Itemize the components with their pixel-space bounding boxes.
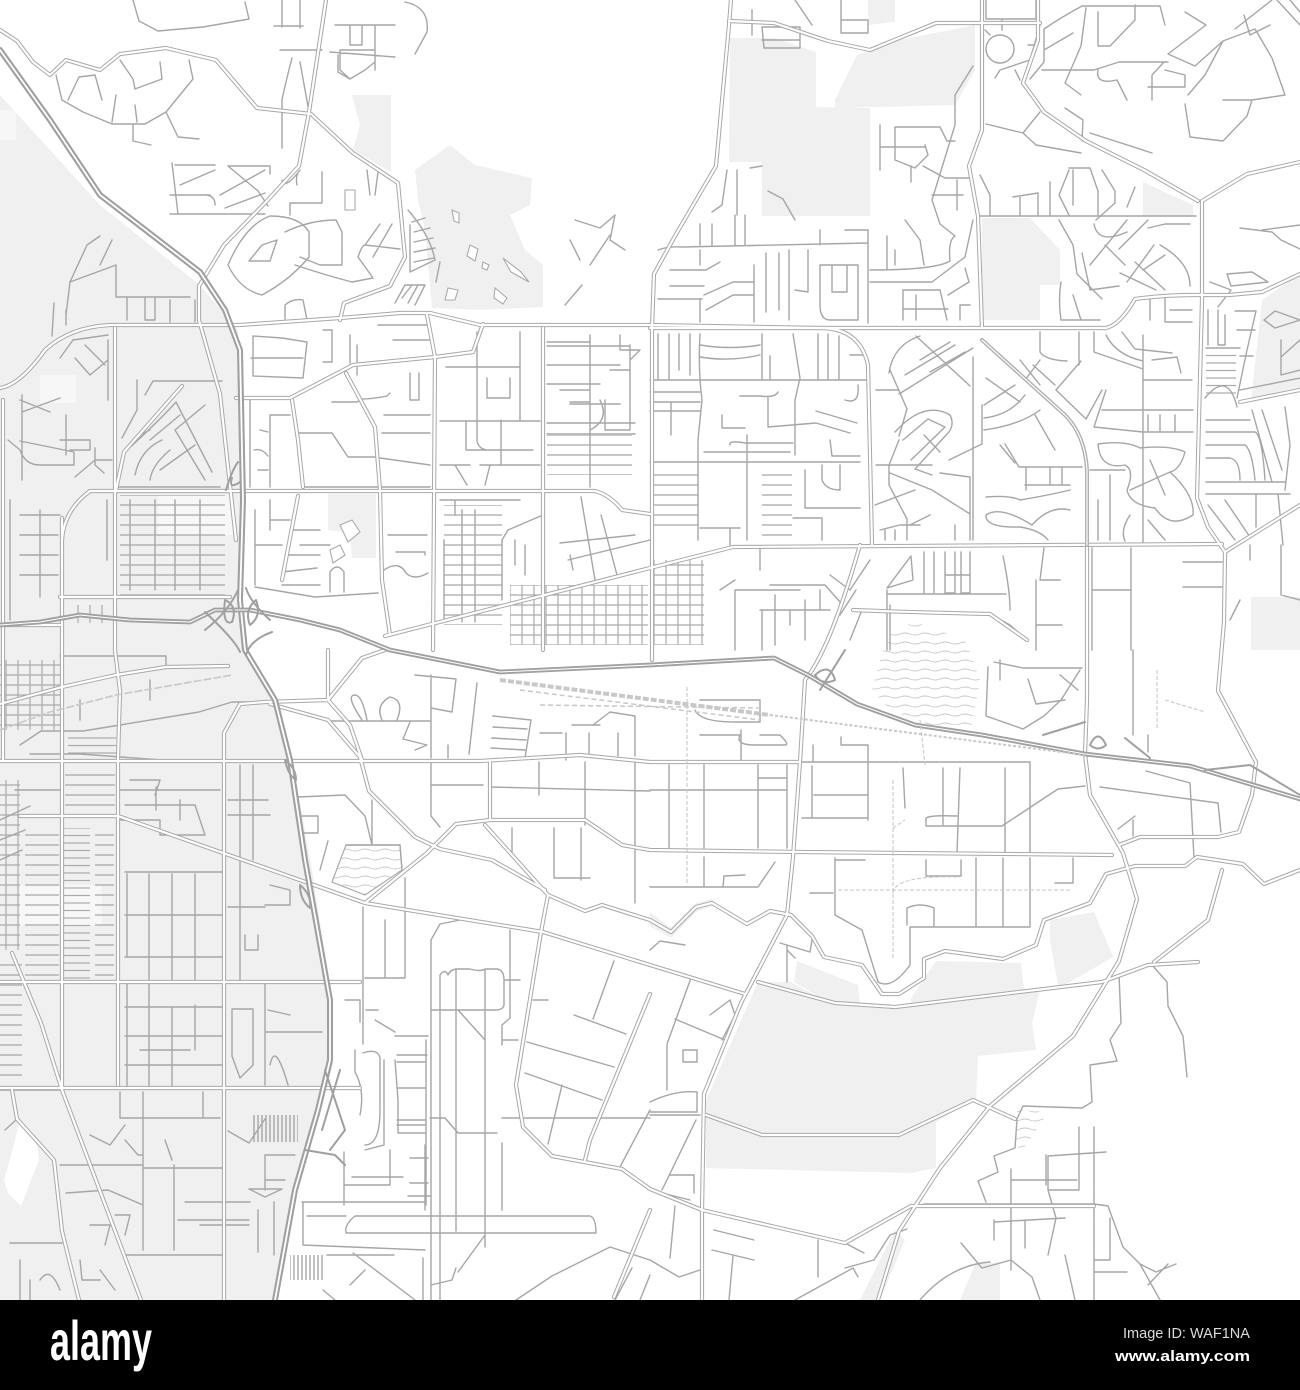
image id: Image ID: WAF1NA <box>1123 1326 1250 1342</box>
footer bar <box>0 1300 1300 1390</box>
lake: north-east striped basin <box>872 622 980 725</box>
streets: arc district <box>875 336 982 540</box>
lake: airport striped basin <box>332 845 402 895</box>
streets: centre south of y650 <box>298 675 650 978</box>
faint watermark patches <box>0 110 233 925</box>
streets: west lower grid <box>125 765 322 1088</box>
freeway: north-south <box>0 50 330 1300</box>
lake: south-west pond <box>4 1123 39 1206</box>
streets: east residential north <box>978 216 1196 322</box>
streets: airport <box>346 920 596 1300</box>
gray area: river bank <box>650 899 712 938</box>
gray area: hill park <box>415 145 543 310</box>
gray area: south hills <box>860 1230 1000 1300</box>
gray area: north central A <box>729 38 870 216</box>
gray area: NE patch <box>1143 182 1193 216</box>
gray area: south fields C <box>911 961 1024 1005</box>
gray area: east patch A <box>1251 597 1300 650</box>
website: www.alamy.com <box>1114 1348 1250 1365</box>
gray area: north hills <box>352 95 391 172</box>
streets: central south of y545 <box>720 545 1300 650</box>
streets: south of main road west <box>107 494 650 622</box>
gray area: south fields main <box>706 982 1040 1173</box>
gray area: central block park <box>328 494 376 558</box>
lake: south striped pond <box>1015 1110 1048 1152</box>
logo text: alamy <box>50 1309 152 1372</box>
rail yard <box>0 670 1205 960</box>
streets: central north <box>250 325 540 487</box>
gray area: south fields B <box>794 961 860 1005</box>
streets: upper downtown <box>0 656 250 860</box>
gray area: north central B <box>835 25 975 108</box>
streets: western hills <box>8 236 222 620</box>
small ponds in park <box>330 190 529 563</box>
streets: north-centre loops <box>228 170 625 320</box>
gray area: west urban district <box>0 95 333 1300</box>
streets: north-west hills <box>56 0 427 215</box>
gray area: south fields D <box>1050 912 1113 985</box>
freeway: diagonal expressway <box>982 340 1087 545</box>
gray area: north strip <box>868 0 895 25</box>
freeway: east-west <box>0 610 1300 799</box>
gray area: east patch B <box>1251 274 1300 402</box>
interchange ramps <box>205 462 1300 1165</box>
streets: north-central residential <box>658 166 868 323</box>
streets: south of freeway <box>650 700 1221 887</box>
streets: river and creeks <box>787 950 1187 1202</box>
streets: south-east <box>650 1127 1176 1300</box>
street grid blocks <box>0 352 1236 1280</box>
streets: south-central <box>502 961 650 1300</box>
streets: far east <box>1205 225 1300 545</box>
streets: centre west of x=868 <box>650 334 868 545</box>
streets: north-east <box>1030 0 1300 141</box>
gray area: block park <box>982 218 1060 320</box>
